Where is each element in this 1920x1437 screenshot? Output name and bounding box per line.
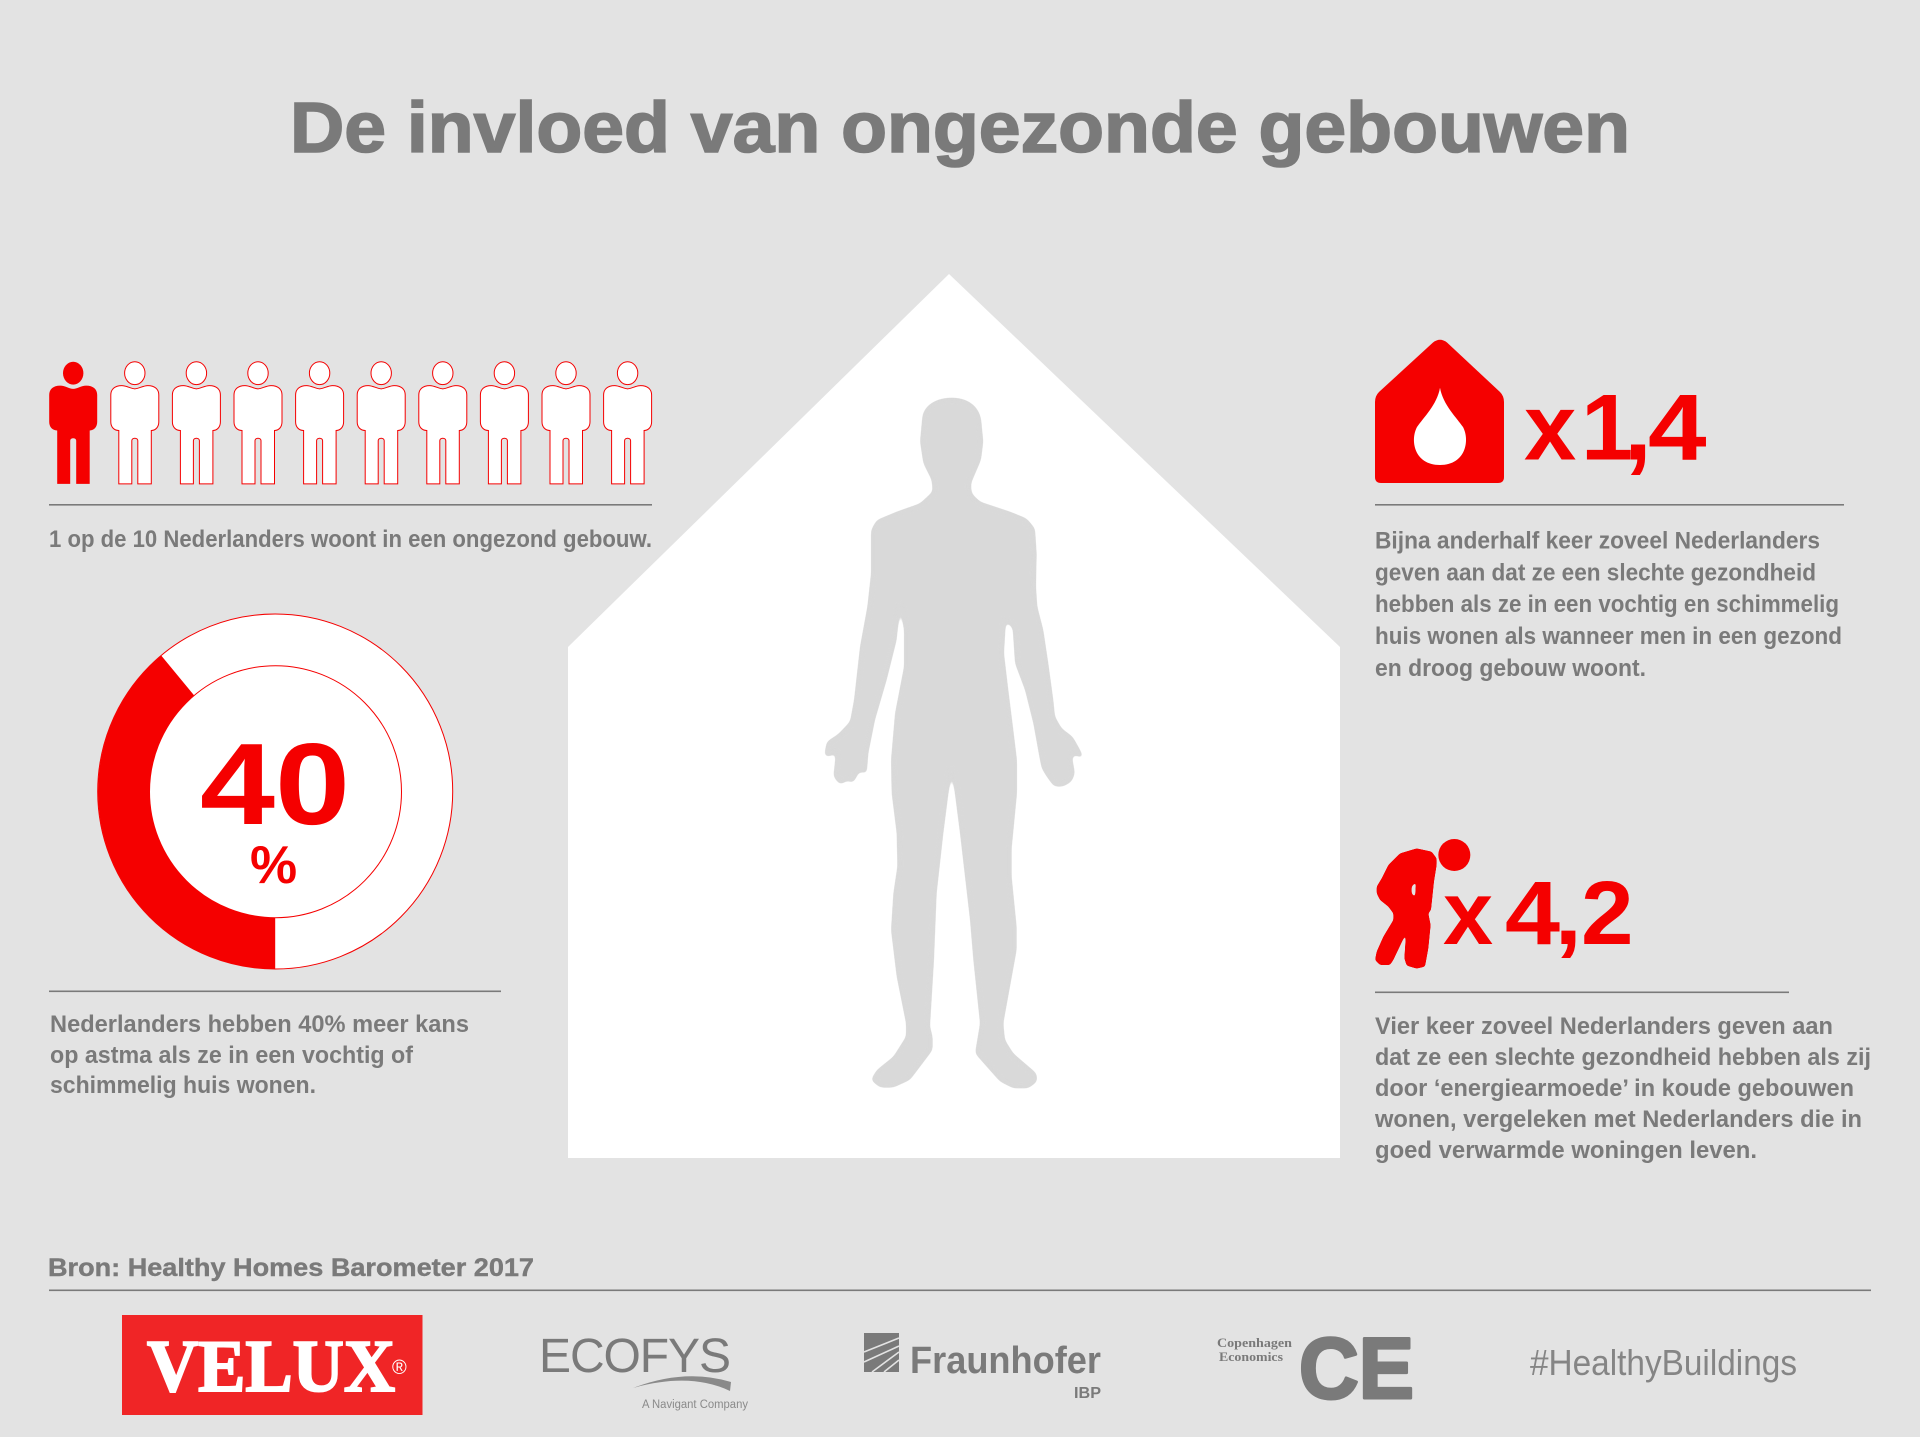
description: en droog gebouw woont. bbox=[1375, 655, 1646, 682]
description: geven aan dat ze een slechte gezondheid bbox=[1375, 560, 1816, 586]
description: Nederlanders hebben 40% meer kans bbox=[50, 1011, 469, 1038]
logo: Copenhagen Economics: Economics bbox=[1219, 1349, 1283, 1364]
pictogram row of ten people bbox=[49, 362, 652, 484]
description: op astma als ze in een vochtig of bbox=[50, 1042, 414, 1069]
description: Vier keer zoveel Nederlanders geven aan bbox=[1375, 1013, 1833, 1040]
logo: Fraunhofer: Fraunhofer bbox=[910, 1340, 1101, 1382]
panel: x 4,2 bbox=[1374, 839, 1871, 1164]
source line: Bron: Healthy Homes Barometer 2017 bbox=[48, 1254, 534, 1282]
description: Bijna anderhalf keer zoveel Nederlanders bbox=[1375, 528, 1820, 554]
description: schimmelig huis wonen. bbox=[50, 1072, 316, 1099]
logo: Copenhagen Economics: Copenhagen bbox=[1217, 1335, 1293, 1350]
logo: ECOFYS bbox=[539, 1330, 748, 1411]
icon: bent-over sick person bbox=[1375, 839, 1470, 969]
logo: ECOFYS: ECOFYS bbox=[539, 1330, 731, 1383]
human silhouette bbox=[824, 398, 1084, 1088]
description: huis wonen als wanneer men in een gezond bbox=[1375, 623, 1842, 650]
panel: x 4,2: 2 bbox=[1581, 862, 1634, 964]
logo: VELUX: ® bbox=[392, 1357, 407, 1379]
description: dat ze een slechte gezondheid hebben als zij bbox=[1375, 1044, 1871, 1071]
description: hebben als ze in een vochtig en schimmelig bbox=[1375, 591, 1839, 618]
panel: 40% asthma bbox=[49, 614, 501, 1099]
multiplier: x bbox=[1443, 864, 1493, 964]
panel: x 1,4: 4 bbox=[1648, 376, 1707, 480]
panel: 1 in 10 bbox=[49, 362, 652, 553]
donut chart bbox=[98, 614, 453, 969]
percent sign: % bbox=[250, 836, 297, 895]
caption: 1 op de 10 Nederlanders woont in een ongezond gebouw. bbox=[49, 526, 652, 553]
logo: VELUX: VELUX bbox=[147, 1326, 395, 1408]
logo: Fraunhofer bbox=[864, 1333, 1101, 1402]
description: wonen, vergeleken met Nederlanders die in bbox=[1374, 1106, 1862, 1133]
panel: x 1,4: , bbox=[1624, 370, 1652, 482]
description bbox=[1374, 1013, 1871, 1164]
description: goed verwarmde woningen leven. bbox=[1375, 1137, 1757, 1164]
description bbox=[1375, 528, 1842, 682]
panel: x 4,2: 4, bbox=[1505, 863, 1582, 964]
description: door ‘energiearmoede’ in koude gebouwen bbox=[1375, 1075, 1854, 1102]
logo: Copenhagen Economics bbox=[1217, 1321, 1414, 1417]
icon: house with water drop bbox=[1375, 340, 1504, 483]
title: De invloed van ongezonde gebouwen bbox=[290, 89, 1630, 168]
logo: Fraunhofer: IBP bbox=[1074, 1385, 1101, 1402]
house with human silhouette bbox=[568, 274, 1340, 1158]
multiplier: x1 bbox=[1524, 374, 1633, 480]
logo: Copenhagen Economics: CE bbox=[1299, 1321, 1414, 1417]
description bbox=[50, 1011, 469, 1099]
value 40: 40 bbox=[200, 719, 350, 849]
panel: x 1,4 bbox=[1375, 340, 1844, 682]
hashtag: #HealthyBuildings bbox=[1530, 1342, 1797, 1383]
house shape bbox=[568, 274, 1340, 1158]
logo: ECOFYS: A Navigant Company bbox=[642, 1399, 748, 1411]
